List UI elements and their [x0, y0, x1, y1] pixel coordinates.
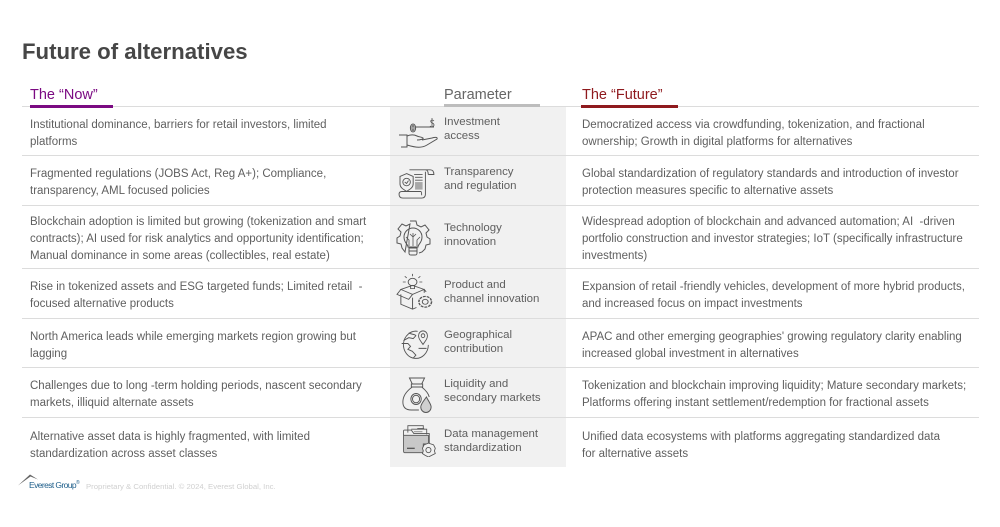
future text: data management standardization	[582, 431, 940, 460]
parameter label: transparency and regulation	[444, 166, 516, 192]
parameter label: product and channel innovation: Product and	[444, 279, 506, 291]
now text: liquidity and secondary markets: markets, illiquid alternate assets	[30, 397, 194, 409]
now text: investment access: platforms	[30, 136, 77, 148]
now text: product and channel innovation	[30, 281, 362, 310]
future text: technology innovation	[582, 216, 963, 262]
now text: technology innovation	[30, 216, 366, 262]
now text: technology innovation: Blockchain adoption is limited but growing (tokenization and smart	[30, 216, 366, 228]
parameter label: technology innovation	[444, 222, 502, 248]
parameter label: liquidity and secondary markets: Liquidity and	[444, 378, 508, 390]
now text: data management standardization: standardization across asset classes	[30, 448, 217, 460]
future text: liquidity and secondary markets: Tokenization and blockchain improving liquidity; Mature secondary markets;	[582, 380, 966, 392]
future text: data management standardization: Unified data ecosystems with platforms aggregating standardized data	[582, 431, 940, 443]
parameter label: product and channel innovation	[444, 279, 539, 305]
icon: folder with documents and shield	[403, 425, 436, 457]
parameter label: transparency and regulation: and regulation	[444, 180, 516, 192]
future text: geographical contribution: increased global investment in alternatives	[582, 348, 799, 360]
future text: investment access	[582, 119, 925, 148]
now text: investment access	[30, 119, 327, 148]
parameter label: investment access: Investment	[444, 116, 500, 128]
future text: technology innovation: Widespread adoption of blockchain and advanced automation; AI -driven	[582, 216, 955, 228]
now text: geographical contribution: North America leads while emerging markets region growing but	[30, 331, 356, 343]
parameter label: data management standardization: standardization	[444, 442, 522, 454]
now text: transparency and regulation	[30, 168, 326, 197]
now text: data management standardization	[30, 431, 310, 460]
future text: data management standardization: for alternative assets	[582, 448, 688, 460]
parameter label: data management standardization	[444, 428, 538, 454]
logo: Everest Group: Everest Group®	[29, 480, 79, 490]
now text: liquidity and secondary markets: Challenges due to long -term holding periods, nascent secondary	[30, 380, 362, 392]
title: Future of alternatives	[22, 39, 248, 64]
footer text: Proprietary & Confidential. © 2024, Everest Global, Inc.	[86, 482, 276, 490]
future text: transparency and regulation: Global standardization of regulatory standards and introduction of investor	[582, 168, 959, 180]
now text: product and channel innovation: Rise in tokenized assets and ESG targeted funds; Limited retail -	[30, 281, 362, 293]
future text: technology innovation: investments)	[582, 250, 647, 262]
icon: shield and scroll	[398, 169, 434, 198]
future text: product and channel innovation: Expansion of retail -friendly vehicles, development of more hybrid products,	[582, 281, 965, 293]
heading: parameter: Parameter	[444, 87, 512, 103]
parameter label: investment access	[444, 116, 500, 142]
parameter label: liquidity and secondary markets: secondary markets	[444, 392, 541, 404]
icon: hand with key and dollar	[399, 118, 438, 148]
accent bar: the future	[581, 105, 678, 108]
future text: transparency and regulation: protection measures specific to alternative assets	[582, 185, 833, 197]
logo: Everest Group	[18, 474, 80, 490]
future text: liquidity and secondary markets: Platforms offering instant settlement/redemption for fractional assets	[582, 397, 929, 409]
parameter label: data management standardization: Data management	[444, 428, 538, 440]
future text: investment access: Democratized access via crowdfunding, tokenization, and fractional	[582, 119, 925, 131]
now text: geographical contribution	[30, 331, 356, 360]
future text: product and channel innovation	[582, 281, 965, 310]
now text: technology innovation: contracts); AI used for risk analytics and opportunity identification;	[30, 233, 364, 245]
heading: the now: The “Now”	[30, 87, 98, 103]
icon: globe with map pin	[402, 330, 429, 359]
future text: geographical contribution: APAC and other emerging geographies' growing regulatory clarity enabling	[582, 331, 962, 343]
heading: the future: The “Future”	[582, 87, 663, 103]
parameter label: technology innovation: Technology	[444, 222, 502, 234]
parameter label: transparency and regulation: Transparency	[444, 166, 514, 178]
now text: geographical contribution: lagging	[30, 348, 67, 360]
parameter label: geographical contribution	[444, 329, 512, 355]
icon: open box with bulb and gear	[396, 274, 432, 310]
now text: data management standardization: Alternative asset data is highly fragmented, with limited	[30, 431, 310, 443]
future text: investment access: ownership; Growth in digital platforms for alternatives	[582, 136, 852, 148]
icon: gear with light bulb	[396, 220, 430, 256]
parameter label: liquidity and secondary markets	[444, 378, 541, 404]
future text: transparency and regulation	[582, 168, 959, 197]
parameter label: geographical contribution: contribution	[444, 343, 503, 355]
accent bar: the now	[30, 105, 113, 108]
now text: transparency and regulation: Fragmented regulations (JOBS Act, Reg A+); Compliance,	[30, 168, 326, 180]
now text: product and channel innovation: focused alternative products	[30, 298, 174, 310]
icon: money bag with drop	[402, 378, 432, 413]
future text: product and channel innovation: and increased focus on impact investments	[582, 298, 803, 310]
now text: transparency and regulation: transparency, AML focused policies	[30, 185, 210, 197]
future text: geographical contribution	[582, 331, 962, 360]
parameter label: geographical contribution: Geographical	[444, 329, 512, 341]
accent bar: parameter	[444, 104, 540, 107]
parameter label: technology innovation: innovation	[444, 236, 496, 248]
future text: liquidity and secondary markets	[582, 380, 966, 409]
now text: liquidity and secondary markets	[30, 380, 362, 409]
parameter column background	[390, 106, 566, 467]
parameter label: product and channel innovation: channel innovation	[444, 293, 539, 305]
now text: investment access: Institutional dominance, barriers for retail investors, limited	[30, 119, 327, 131]
parameter label: investment access: access	[444, 130, 480, 142]
future text: technology innovation: portfolio construction and investor strategies; IoT (specifically infrastructure	[582, 233, 963, 245]
now text: technology innovation: Manual dominance in some areas (collectibles, real estate)	[30, 250, 330, 262]
